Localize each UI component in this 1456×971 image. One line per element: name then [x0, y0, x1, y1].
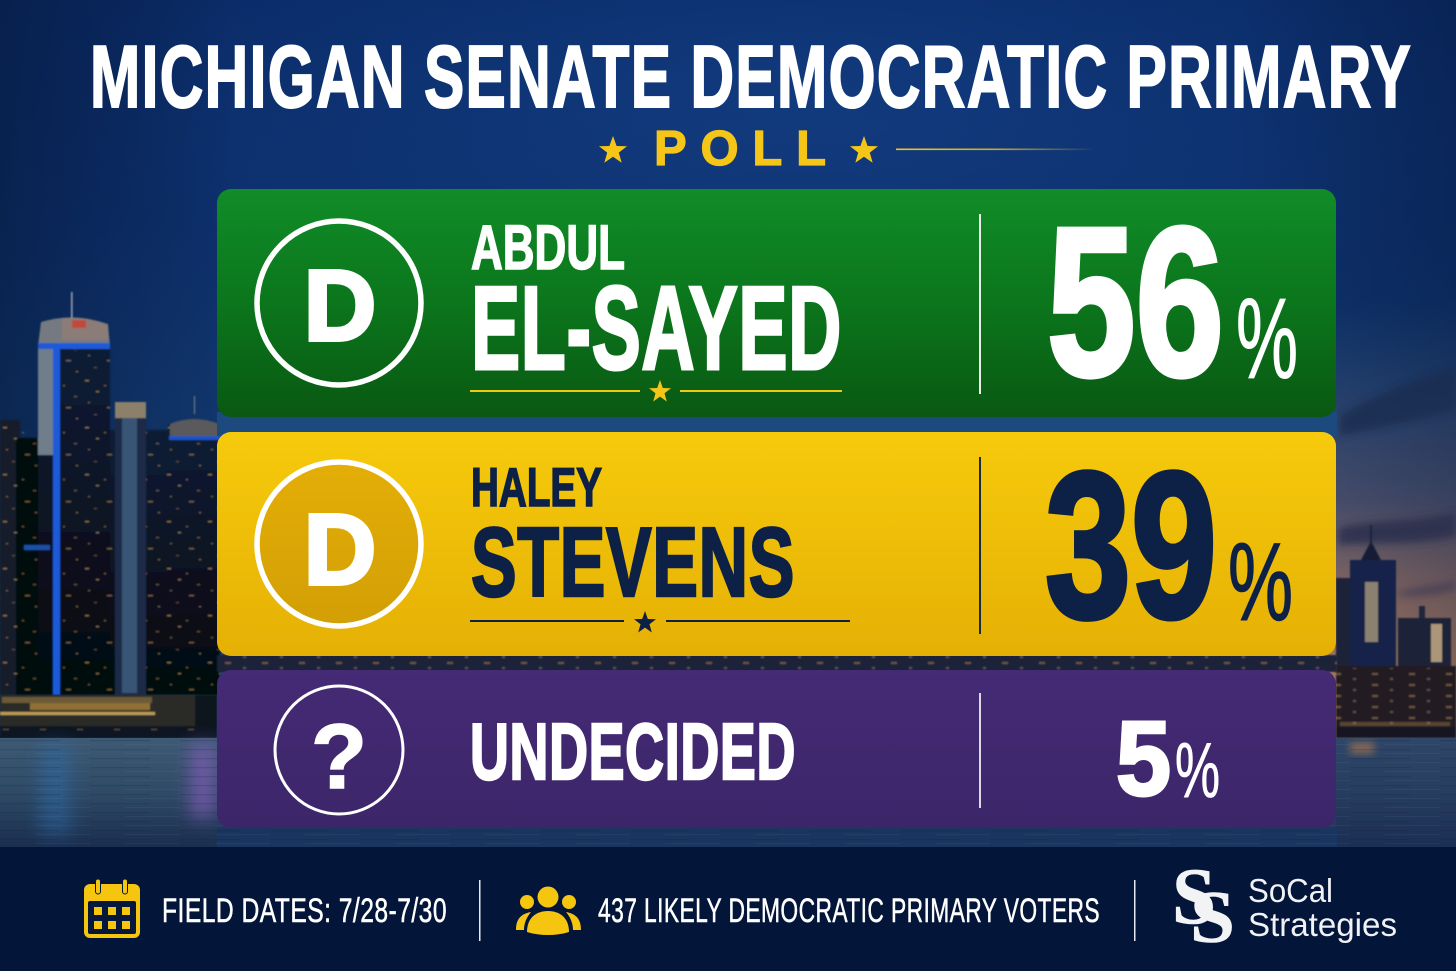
name underline with star: [470, 380, 842, 402]
divider: [979, 214, 981, 394]
candidate last name: STEVENS: [471, 507, 795, 617]
icon: Democratic D badge: [257, 221, 421, 385]
divider: [979, 693, 981, 808]
candidate first name: HALEY: [471, 456, 602, 518]
icon: voters group: [516, 886, 581, 935]
icon: Democratic D badge: [257, 462, 421, 626]
sky band between panels: [217, 412, 1337, 436]
skyline: right towers: [1336, 525, 1456, 738]
icon: Democratic D badge: D: [304, 250, 376, 362]
clouds at dusk: [1338, 366, 1456, 597]
percentage 56: 56: [1047, 183, 1224, 420]
icon: calendar: [84, 879, 140, 938]
panel: Undecided 5%: [217, 670, 1336, 828]
poll label: POLL: [654, 122, 826, 176]
footer bar: [0, 847, 1456, 971]
percent sign: %: [1175, 726, 1220, 814]
name underline with star: [470, 611, 850, 632]
subtitle: poll: [599, 122, 1096, 176]
icon: question mark badge: [275, 686, 403, 814]
skyline: left towers: [0, 292, 220, 695]
river water with reflections: [0, 738, 1456, 848]
icon: Democratic D badge: D: [304, 494, 376, 606]
divider: [1134, 880, 1136, 941]
logo mark: S: [1172, 853, 1216, 941]
icon: question mark badge: ?: [311, 706, 367, 808]
logo wordmark: SoCal: [1248, 872, 1333, 909]
percent sign: %: [1236, 276, 1298, 403]
distant city strip between panels: [217, 655, 1337, 672]
percent sign: %: [1228, 521, 1293, 644]
sample size text: 437 LIKELY DEMOCRATIC PRIMARY VOTERS: [598, 892, 1100, 930]
icon: left star: [599, 136, 627, 163]
logo mark: [1172, 853, 1235, 959]
logo mark: S: [1190, 877, 1235, 959]
icon: right star: [850, 136, 878, 163]
skyline: left podium and shoreline: [0, 695, 217, 738]
logo wordmark: [1248, 872, 1397, 943]
candidate first name: ABDUL: [471, 213, 625, 283]
divider: [979, 457, 981, 634]
percentage 39: 39: [1045, 430, 1217, 662]
accent line: [896, 148, 1096, 150]
divider: [479, 880, 480, 941]
candidate last name: EL-SAYED: [471, 262, 842, 395]
panel: Abdul El-Sayed 56%: [217, 183, 1336, 420]
background: evening sky: [0, 0, 1456, 740]
panel: Haley Stevens 39%: [217, 430, 1336, 662]
undecided label: UNDECIDED: [470, 707, 796, 796]
field dates text: FIELD DATES: 7/28-7/30: [162, 892, 447, 930]
logo wordmark: Strategies: [1248, 906, 1397, 943]
percentage 5: 5: [1116, 700, 1171, 818]
logo: SoCal Strategies: [1172, 853, 1397, 959]
